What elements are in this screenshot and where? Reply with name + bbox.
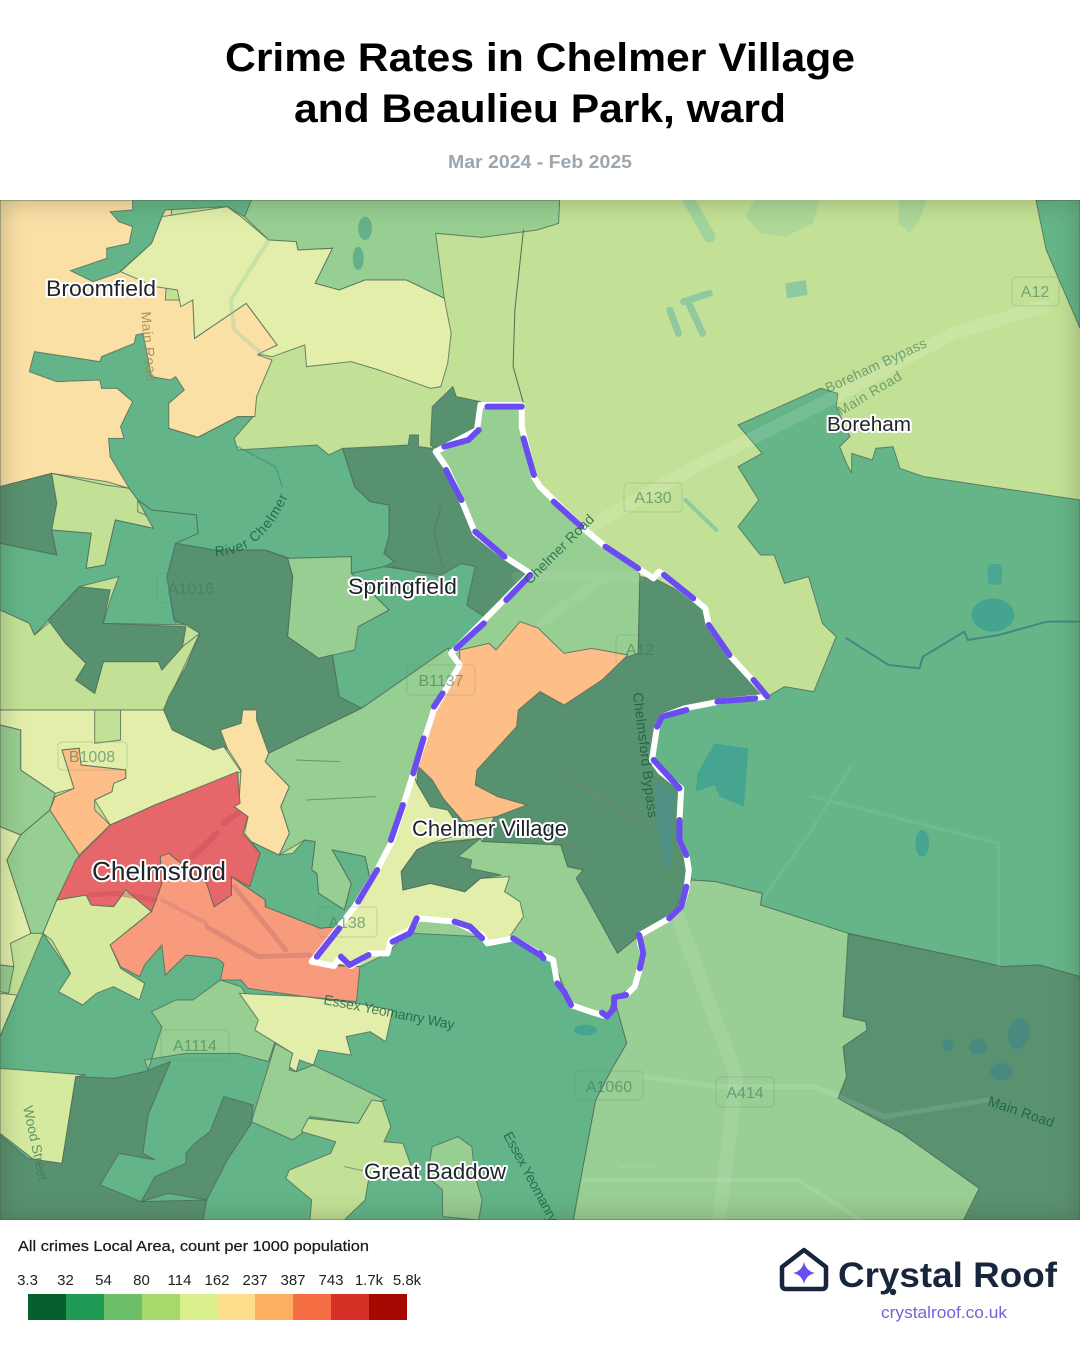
road number shields: A12 xyxy=(1021,284,1049,301)
street names: Chelmsford Bypass xyxy=(630,691,661,818)
legend values: 32 xyxy=(57,1272,74,1289)
road number shields: B1137 xyxy=(418,673,464,690)
legend values xyxy=(17,1272,422,1289)
road number shields: A1114 xyxy=(173,1038,217,1055)
road number shields: A138 xyxy=(328,915,366,932)
place names: Boreham xyxy=(827,414,911,436)
street names: Main Road xyxy=(138,311,160,382)
legend values: 387 xyxy=(280,1272,306,1289)
street names: Boreham Bypass xyxy=(823,335,929,396)
street names: River Chelmer xyxy=(216,494,287,556)
roads and water details xyxy=(90,200,1080,1220)
street names: Wood Street xyxy=(20,1104,52,1182)
icon: house with star xyxy=(782,1250,826,1289)
url: crystalroof.co.uk xyxy=(881,1304,1008,1322)
legend values: 237 xyxy=(242,1272,268,1289)
road number shields: A12 xyxy=(626,642,654,659)
place names: Chelmsford xyxy=(92,856,226,886)
legend values: 1.7k xyxy=(355,1272,384,1289)
legend values: 54 xyxy=(95,1272,112,1289)
legend xyxy=(17,1238,422,1320)
place names: Great Baddow xyxy=(364,1159,506,1184)
street names: Main Road xyxy=(986,1093,1056,1130)
title xyxy=(225,36,855,172)
map labels xyxy=(20,276,1060,1220)
wordmark: Crystal Roof xyxy=(838,1256,1057,1295)
road number shields: A130 xyxy=(634,490,672,507)
ward boundary xyxy=(308,402,770,1020)
map vignette xyxy=(0,200,1080,1220)
legend values: 80 xyxy=(133,1272,150,1289)
place names xyxy=(46,276,911,1184)
legend values: 162 xyxy=(204,1272,230,1289)
logo: Crystal Roof xyxy=(780,1248,1058,1322)
title: and Beaulieu Park, ward xyxy=(294,87,786,131)
street names: Chelmer Road xyxy=(521,511,597,587)
road number shields: B1008 xyxy=(69,749,115,766)
place names: Broomfield xyxy=(46,276,156,301)
keyhole tail of the y xyxy=(890,1289,896,1295)
title: Crime Rates in Chelmer Village xyxy=(225,36,855,80)
legend values: 5.8k xyxy=(393,1272,422,1289)
legend title: All crimes Local Area, count per 1000 population xyxy=(18,1238,369,1255)
street names xyxy=(20,311,1056,1220)
road number shields xyxy=(58,277,1059,1107)
road number shields: A1016 xyxy=(168,581,214,598)
place names: Springfield xyxy=(348,574,457,599)
street names: Essex Yeomanry Way xyxy=(322,991,456,1032)
legend values: 743 xyxy=(318,1272,344,1289)
legend values: 3.3 xyxy=(17,1272,38,1289)
street names: Main Road xyxy=(834,368,904,419)
choropleth map xyxy=(0,200,1080,1220)
road number shields: A1060 xyxy=(586,1079,632,1096)
road number shields: A414 xyxy=(726,1085,764,1102)
legend colour scale xyxy=(28,1294,407,1320)
title: Mar 2024 - Feb 2025 xyxy=(448,152,632,172)
legend values: 114 xyxy=(168,1272,191,1289)
place names: Chelmer Village xyxy=(412,816,567,841)
